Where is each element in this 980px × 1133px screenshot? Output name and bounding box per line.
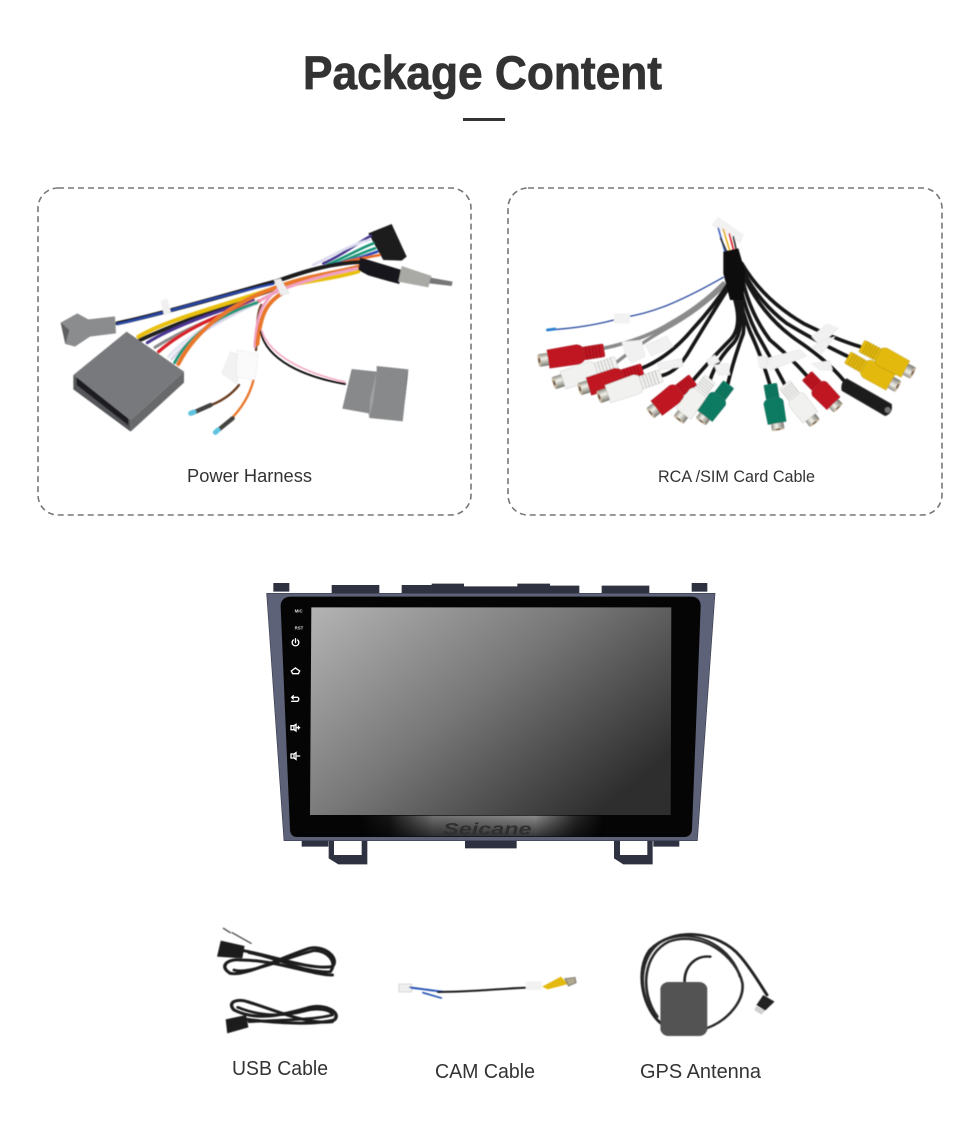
- lower USB lead: [226, 1000, 336, 1033]
- power harness photo: [61, 224, 453, 432]
- side button icons: RST: [295, 625, 304, 630]
- RCA cable label: RCA /SIM Card Cable: [658, 467, 815, 486]
- bezel frame: [267, 593, 715, 841]
- screen: [310, 607, 671, 815]
- power harness label: Power Harness: [187, 466, 312, 486]
- side button icons: MIC: [295, 609, 303, 614]
- panel: power harness: [38, 188, 471, 515]
- RCA cable photo: [536, 217, 919, 432]
- title: Package Content: [303, 46, 662, 99]
- brand logo: Seicane: [443, 819, 531, 838]
- mounting tabs: [273, 583, 707, 864]
- side button icons: [291, 609, 304, 759]
- title underline: [463, 118, 505, 121]
- head unit: [267, 583, 715, 864]
- USB cable label: USB Cable: [232, 1058, 328, 1080]
- panel: RCA / SIM card cable: [508, 188, 942, 515]
- USB cable: [217, 928, 336, 1033]
- CAM cable label: CAM Cable: [435, 1061, 535, 1083]
- GPS antenna: [642, 934, 775, 1036]
- upper USB lead: [217, 928, 334, 975]
- lower bezel sheen: [360, 816, 603, 836]
- black glass: [281, 597, 701, 837]
- GPS antenna label: GPS Antenna: [640, 1061, 762, 1083]
- CAM cable: [399, 977, 576, 998]
